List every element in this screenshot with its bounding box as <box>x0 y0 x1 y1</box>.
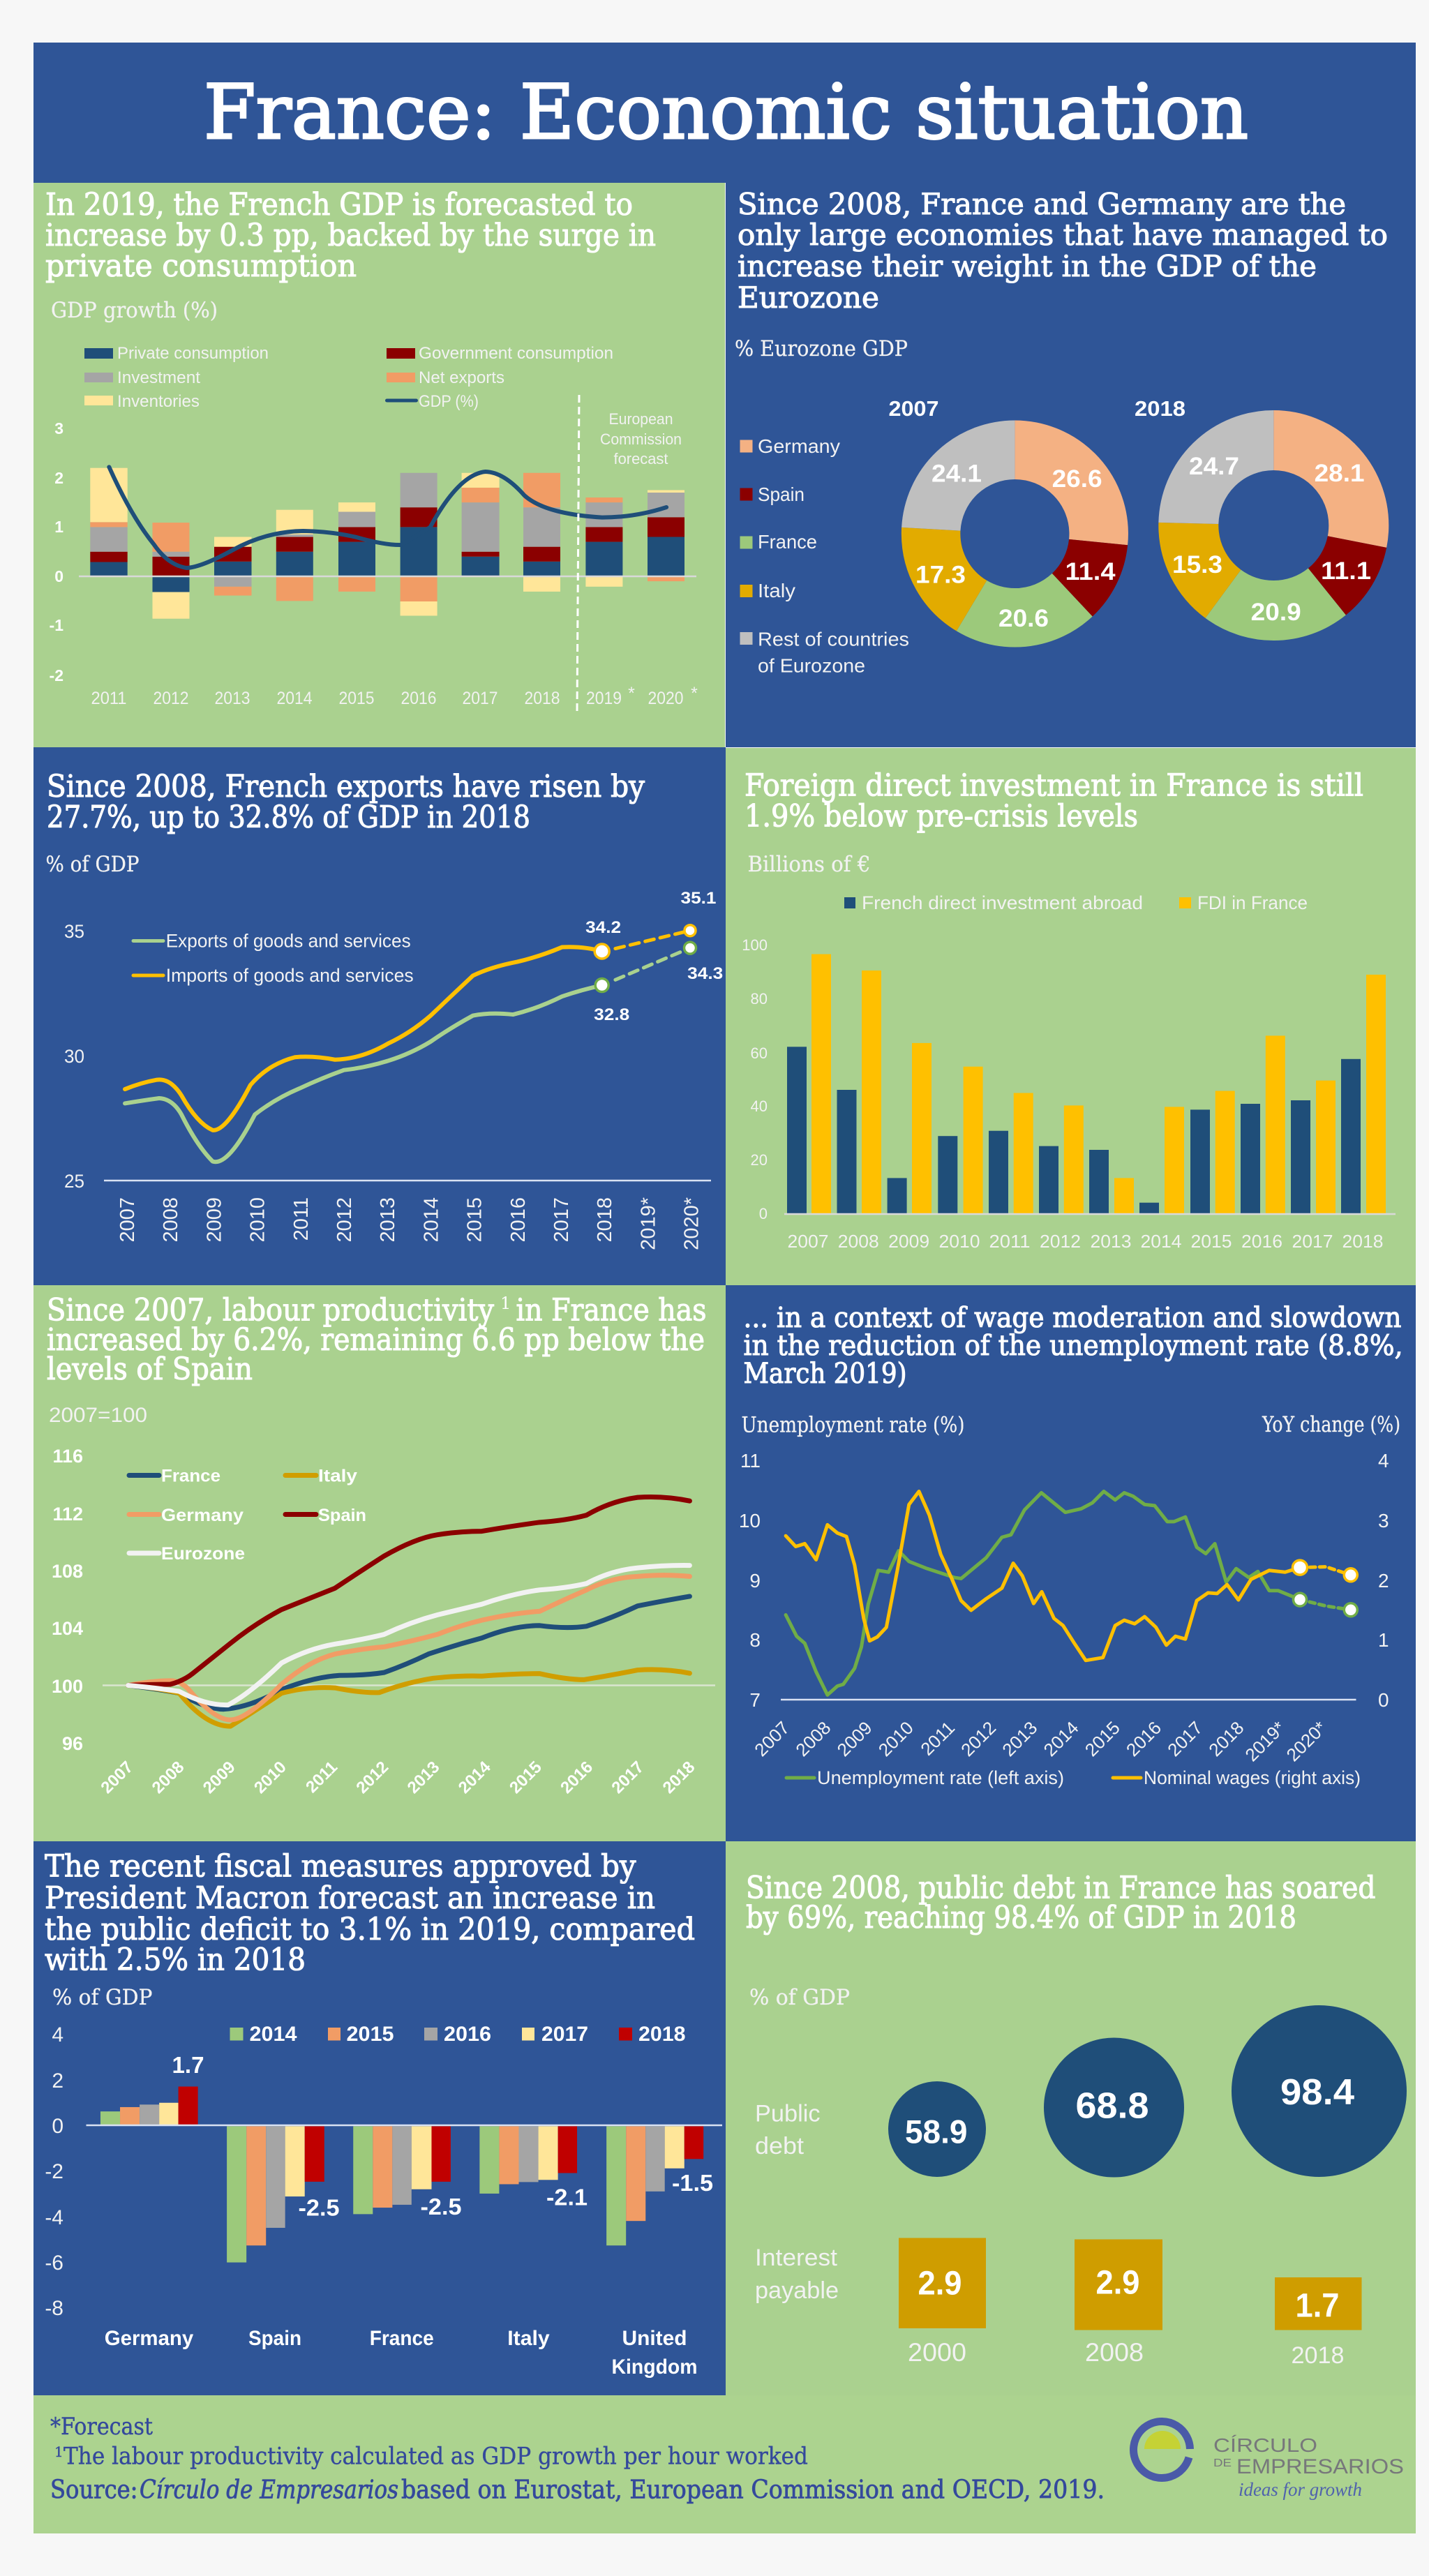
panel: exports and imports <box>33 747 726 1285</box>
y axis labels <box>64 921 84 1192</box>
exports line <box>125 948 690 1162</box>
legend: FDI in France <box>1197 892 1308 913</box>
heading: in France has <box>516 1292 706 1328</box>
x axis labels: 2016 <box>557 1758 597 1797</box>
heading: 1.9% below pre-crisis levels <box>745 798 1138 834</box>
x axis labels: 2009 <box>888 1231 929 1252</box>
heading: Eurozone <box>738 280 879 315</box>
x axis labels: 2014 <box>420 1197 442 1243</box>
source note: Círculo de Empresarios <box>140 2476 398 2505</box>
y axis labels: 3 <box>54 419 63 437</box>
y axis labels: 100 <box>52 1676 83 1697</box>
year labels: 2008 <box>1085 2338 1144 2367</box>
debt bubble 2000: 58.9 <box>905 2113 967 2150</box>
donut 2018 values <box>1172 453 1371 626</box>
row label: interest payable: Interest <box>755 2245 838 2271</box>
x axis labels: 2011 <box>302 1758 341 1797</box>
source note <box>50 2476 1105 2505</box>
x axis labels: 2012 <box>154 689 188 708</box>
year labels: 2000 <box>908 2338 966 2367</box>
x axis labels: 2018 <box>659 1758 698 1797</box>
heading: Foreign direct investment in France is still <box>745 767 1363 804</box>
year labels <box>908 2338 1344 2369</box>
x axis labels: 2016 <box>401 689 437 708</box>
x axis labels: 2011 <box>989 1231 1030 1252</box>
country labels: Germany <box>105 2327 194 2350</box>
x axis labels: 2020* <box>681 1197 703 1250</box>
data markers <box>1292 1560 1357 1617</box>
x axis labels: 2012 <box>957 1717 1000 1760</box>
x axis labels: 2010 <box>250 1758 290 1797</box>
row label: public debt: Public <box>755 2100 821 2127</box>
legend: Investment <box>117 368 200 387</box>
x axis labels: 2009 <box>833 1717 876 1760</box>
x axis labels: 2016 <box>1241 1231 1282 1252</box>
x axis labels: 2014 <box>1040 1717 1083 1760</box>
right axis title: YoY change (%) <box>1262 1412 1400 1437</box>
x axis labels: 2016 <box>507 1197 530 1243</box>
legend: Italy <box>758 580 795 601</box>
legend: Imports of goods and services <box>166 965 414 986</box>
x axis labels: 2010 <box>874 1717 918 1760</box>
imports line <box>125 931 690 1130</box>
y axis labels: -2 <box>45 2160 63 2183</box>
legend <box>786 1767 1361 1788</box>
y axis labels <box>50 419 63 684</box>
axis line <box>103 1684 715 1686</box>
x axis labels: 2013 <box>404 1758 443 1797</box>
legend: 2014 <box>250 2023 297 2046</box>
country labels <box>105 2327 698 2379</box>
x axis labels: 2015 <box>1190 1231 1232 1252</box>
heading: Since 2008, French exports have risen by <box>47 769 645 804</box>
x axis labels: 2020 <box>648 689 684 708</box>
value labels: -2.1 <box>546 2184 588 2210</box>
left y axis labels: 10 <box>739 1510 761 1532</box>
legend: French direct investment abroad <box>862 892 1143 913</box>
heading <box>745 767 1363 834</box>
logo wordmark: ideas for growth <box>1239 2479 1362 2500</box>
y axis labels: 40 <box>751 1098 768 1115</box>
x axis labels <box>117 1197 703 1250</box>
x axis labels: 2015 <box>506 1758 546 1797</box>
x axis labels: 2008 <box>791 1717 835 1760</box>
panel: unemployment and wages <box>726 1285 1416 1841</box>
legend: 2018 <box>638 2023 685 2046</box>
x axis labels: 2018 <box>594 1197 616 1243</box>
interest box 2000: 2.9 <box>918 2265 962 2302</box>
x axis labels <box>91 684 698 708</box>
y axis labels: 35 <box>64 921 84 942</box>
heading: 1 <box>500 1294 511 1313</box>
forecast divider <box>577 395 579 714</box>
y axis labels: 20 <box>751 1151 768 1169</box>
x axis labels <box>97 1758 698 1797</box>
x axis labels: 2018 <box>1342 1231 1383 1252</box>
x axis labels: 2013 <box>998 1717 1041 1760</box>
bars: French direct investment abroad <box>787 1047 1361 1214</box>
unit label: % of GDP <box>46 852 140 877</box>
interest box 2018 <box>1275 2277 1362 2330</box>
x axis labels: 2013 <box>215 689 250 708</box>
heading <box>744 1302 1402 1390</box>
y axis labels: 25 <box>64 1171 84 1192</box>
forecast note: *Forecast <box>50 2413 153 2441</box>
x axis labels: 2016 <box>1122 1717 1165 1760</box>
debt bubble 2018: 98.4 <box>1280 2072 1354 2113</box>
data labels: 34.2 <box>585 918 621 937</box>
x axis labels: 2007 <box>117 1197 139 1243</box>
x axis labels: 2014 <box>276 689 313 708</box>
y axis labels: 104 <box>52 1618 83 1639</box>
y axis labels <box>742 936 768 1222</box>
legend: Inventories <box>117 392 200 411</box>
country labels: Italy <box>507 2327 550 2350</box>
left y axis labels <box>739 1450 761 1711</box>
heading: In 2019, the French GDP is forecasted to <box>45 187 633 223</box>
donut 2007 values: 20.6 <box>998 605 1049 632</box>
country labels: France <box>370 2327 434 2350</box>
panel: GDP growth <box>33 183 725 747</box>
x axis labels: 2018 <box>1204 1717 1248 1760</box>
legend: Government consumption <box>419 344 613 363</box>
legend <box>84 344 613 411</box>
donut 2007 values: 24.1 <box>932 460 982 487</box>
forecast label: Commission <box>600 430 682 448</box>
legend: Rest of countries <box>758 628 909 650</box>
legend: Germany <box>161 1506 244 1525</box>
logo wordmark <box>1213 2434 1404 2500</box>
y axis labels: 2 <box>54 469 63 487</box>
donut 2018 values: 11.1 <box>1321 557 1371 585</box>
left y axis labels: 7 <box>749 1689 761 1711</box>
heading: increase by 0.3 pp, backed by the surge in <box>45 218 656 253</box>
forecast label <box>600 410 682 467</box>
productivity lines <box>128 1497 689 1726</box>
y axis labels: -2 <box>50 666 63 684</box>
legend: Spain <box>758 484 805 505</box>
source note: Source: <box>50 2476 138 2505</box>
y axis labels: 116 <box>52 1446 83 1467</box>
y axis labels: -8 <box>45 2297 63 2320</box>
bars: FDI in France <box>811 954 1386 1214</box>
year labels: 2007 <box>889 396 939 421</box>
axis line <box>87 2125 722 2126</box>
y axis labels: 80 <box>751 990 768 1008</box>
source note: based on Eurostat, European Commission and OECD, 2019. <box>401 2476 1105 2505</box>
x axis labels: 2011 <box>916 1717 959 1760</box>
logo wordmark: CÍRCULO <box>1213 2434 1317 2456</box>
x axis labels: 2014 <box>1140 1231 1182 1252</box>
legend: 2016 <box>444 2023 491 2046</box>
donut 2018 values: 28.1 <box>1315 460 1365 487</box>
left axis title: Unemployment rate (%) <box>741 1412 964 1437</box>
row label: public debt: debt <box>755 2133 805 2159</box>
x axis labels: 2019* <box>637 1197 659 1250</box>
y axis labels: 1 <box>54 518 63 536</box>
heading: ... in a context of wage moderation and slowdown <box>744 1302 1401 1334</box>
legend: GDP (%) <box>419 392 479 411</box>
x axis labels: 2013 <box>377 1197 399 1243</box>
y axis labels: 96 <box>62 1733 83 1754</box>
value labels <box>172 2052 713 2220</box>
legend <box>740 435 909 677</box>
x axis labels: 2012 <box>352 1758 392 1797</box>
axis line <box>79 576 696 577</box>
y axis labels: 108 <box>52 1561 83 1582</box>
legend: of Eurozone <box>758 654 865 677</box>
unit label: Billions of € <box>748 852 871 877</box>
donut 2018 values: 15.3 <box>1172 551 1222 578</box>
x axis labels: 2014 <box>455 1758 495 1797</box>
x axis labels: 2012 <box>334 1197 356 1243</box>
y axis labels: 100 <box>742 936 768 954</box>
x axis labels: 2008 <box>838 1231 879 1252</box>
productivity note: 1 <box>54 2443 63 2460</box>
heading: by 69%, reaching 98.4% of GDP in 2018 <box>746 1900 1296 1935</box>
x axis labels: 2015 <box>339 689 374 708</box>
y axis labels: 2 <box>52 2069 63 2092</box>
x axis labels: * <box>628 684 635 703</box>
country labels: United <box>622 2327 687 2350</box>
legend: 2017 <box>541 2023 588 2046</box>
donut 2018 values: 24.7 <box>1189 453 1239 480</box>
x axis labels: 2020* <box>1282 1717 1331 1765</box>
debt bubble 2008 <box>1044 2037 1184 2177</box>
x axis labels: * <box>691 684 698 703</box>
heading: in the reduction of the unemployment rate (8.8%, <box>744 1330 1402 1362</box>
x axis labels: 2009 <box>200 1758 239 1797</box>
row label: public debt <box>755 2100 821 2159</box>
heading <box>746 1870 1376 1935</box>
legend: 2015 <box>346 2023 394 2046</box>
heading <box>47 1292 706 1387</box>
logo mark <box>1134 2422 1190 2478</box>
legend: Unemployment rate (left axis) <box>817 1767 1064 1788</box>
x axis labels: 2015 <box>1081 1717 1124 1760</box>
y axis labels: 0 <box>54 567 63 585</box>
legend: France <box>758 531 817 553</box>
unit label: % Eurozone GDP <box>735 336 908 361</box>
x axis labels: 2019 <box>586 689 622 708</box>
forecast label: forecast <box>614 450 668 467</box>
panel: labour productivity <box>33 1285 726 1841</box>
legend <box>129 1467 366 1564</box>
axis line <box>784 1213 1396 1215</box>
x axis labels: 2018 <box>525 689 560 708</box>
x axis labels: 2013 <box>1090 1231 1132 1252</box>
panel: Eurozone GDP share <box>726 183 1416 747</box>
axis line <box>781 1699 1356 1700</box>
heading <box>45 1849 695 1977</box>
heading: The recent fiscal measures approved by <box>45 1849 636 1884</box>
x axis labels: 2012 <box>1040 1231 1081 1252</box>
y axis labels: -4 <box>45 2206 63 2229</box>
debt bubble 2008: 68.8 <box>1076 2086 1149 2127</box>
donut 2007 values: 26.6 <box>1052 465 1102 493</box>
debt bubble 2000 <box>888 2081 986 2177</box>
legend: Spain <box>318 1506 366 1525</box>
logo wordmark: EMPRESARIOS <box>1236 2455 1404 2478</box>
left y axis labels: 11 <box>740 1450 761 1472</box>
right y axis labels: 1 <box>1378 1629 1389 1651</box>
data labels: 32.8 <box>594 1005 629 1024</box>
x axis labels: 2010 <box>247 1197 269 1243</box>
right y axis labels <box>1378 1450 1389 1711</box>
data labels: 34.3 <box>687 964 723 983</box>
value labels: 1.7 <box>172 2052 204 2078</box>
interest box 2018: 1.7 <box>1295 2287 1340 2325</box>
panel: public deficit <box>33 1841 726 2395</box>
value labels: -2.5 <box>299 2195 339 2220</box>
heading <box>45 187 656 284</box>
title: France: Economic situation <box>204 69 1248 156</box>
y axis labels: -6 <box>45 2252 63 2275</box>
heading: the public deficit to 3.1% in 2019, compared <box>45 1912 695 1947</box>
right y axis labels: 3 <box>1378 1510 1389 1532</box>
grouped bars <box>100 2087 703 2263</box>
panel: foreign direct investment <box>726 748 1416 1285</box>
data markers <box>594 925 696 992</box>
legend <box>230 2023 685 2046</box>
unemployment line <box>786 1491 1351 1695</box>
heading: Since 2008, France and Germany are the <box>738 187 1346 221</box>
forecast label: European <box>608 410 673 428</box>
logo <box>1134 2422 1404 2500</box>
x axis labels: 2007 <box>787 1231 829 1252</box>
donut 2007 values: 11.4 <box>1065 558 1116 585</box>
logo wordmark: DE <box>1213 2457 1232 2469</box>
donut 2018 values: 20.9 <box>1251 599 1301 626</box>
x axis labels: 2017 <box>462 689 498 708</box>
legend: France <box>161 1467 220 1486</box>
interest box 2008: 2.9 <box>1095 2265 1140 2301</box>
unit label: GDP growth (%) <box>51 298 218 323</box>
unit label: % of GDP <box>749 1985 850 2010</box>
x axis labels: 2017 <box>608 1758 648 1797</box>
x axis labels: 2019* <box>1241 1717 1289 1765</box>
x axis labels: 2015 <box>464 1197 486 1243</box>
legend <box>844 892 1308 913</box>
legend <box>133 931 414 986</box>
heading: President Macron forecast an increase in <box>45 1880 655 1916</box>
debt bubble 2018 <box>1232 2005 1407 2177</box>
row label: interest payable <box>755 2245 839 2304</box>
x axis labels: 2009 <box>203 1197 225 1243</box>
x axis labels: 2011 <box>91 689 127 708</box>
heading <box>738 187 1388 315</box>
legend: Nominal wages (right axis) <box>1144 1767 1361 1788</box>
x axis labels <box>787 1231 1383 1252</box>
interest box 2000 <box>899 2238 986 2328</box>
legend: Private consumption <box>117 344 269 363</box>
heading: 27.7%, up to 32.8% of GDP in 2018 <box>47 800 530 835</box>
legend: Eurozone <box>161 1544 245 1564</box>
country labels: Kingdom <box>611 2356 698 2379</box>
panel: public debt <box>726 1841 1416 2396</box>
legend: Net exports <box>419 368 504 387</box>
heading: increased by 6.2%, remaining 6.6 pp below the <box>47 1322 705 1358</box>
unit label: 2007=100 <box>49 1404 147 1427</box>
heading: levels of Spain <box>47 1351 253 1387</box>
heading: increase their weight in the GDP of the <box>738 249 1317 283</box>
legend: Germany <box>758 435 840 457</box>
heading: with 2.5% in 2018 <box>45 1942 306 1977</box>
x axis labels: 2017 <box>1292 1231 1333 1252</box>
donut chart 2007 <box>931 450 1099 617</box>
heading: Since 2007, labour productivity <box>47 1292 494 1328</box>
x axis labels: 2008 <box>149 1758 188 1797</box>
y axis labels: 112 <box>52 1504 83 1525</box>
heading: March 2019) <box>744 1358 907 1390</box>
year labels: 2018 <box>1291 2342 1344 2369</box>
left y axis labels: 9 <box>749 1570 761 1592</box>
x axis labels: 2010 <box>939 1231 980 1252</box>
heading: private consumption <box>45 248 357 284</box>
nominal wages line <box>786 1491 1351 1661</box>
x axis labels: 2008 <box>160 1197 182 1243</box>
x axis labels: 2017 <box>551 1197 573 1243</box>
row label: interest payable: payable <box>755 2277 839 2304</box>
right y axis labels: 0 <box>1378 1689 1389 1711</box>
y axis labels: 30 <box>64 1046 84 1067</box>
right y axis labels: 2 <box>1378 1570 1389 1592</box>
y axis labels: 60 <box>751 1044 768 1062</box>
y axis labels: 4 <box>52 2023 63 2046</box>
x axis labels <box>750 1717 1331 1765</box>
y axis labels <box>52 1446 83 1754</box>
y axis labels: 0 <box>759 1205 768 1222</box>
x axis labels: 2007 <box>750 1717 793 1760</box>
heading: only large economies that have managed to <box>738 218 1388 252</box>
value labels: -1.5 <box>672 2170 713 2196</box>
country labels: Spain <box>248 2327 301 2350</box>
heading <box>47 769 645 835</box>
value labels: -2.5 <box>420 2194 462 2219</box>
interest box 2008 <box>1075 2240 1162 2330</box>
x axis labels: 2007 <box>97 1758 137 1797</box>
y axis labels: -1 <box>50 616 63 634</box>
unit label: % of GDP <box>52 1985 152 2010</box>
donut chart 2018 <box>1188 440 1359 611</box>
right y axis labels: 4 <box>1378 1450 1389 1472</box>
data labels: 35.1 <box>681 889 716 908</box>
stacked bars <box>90 468 684 619</box>
donut 2007 values: 17.3 <box>915 562 966 589</box>
x axis labels: 2011 <box>290 1197 313 1241</box>
legend: Exports of goods and services <box>166 931 411 952</box>
legend: Italy <box>318 1467 357 1486</box>
year labels: 2018 <box>1135 396 1185 421</box>
year labels <box>889 396 1185 421</box>
y axis labels: 0 <box>52 2115 63 2138</box>
axis line <box>104 1180 711 1181</box>
data labels <box>585 889 723 1024</box>
productivity note: The labour productivity calculated as GDP growth per hour worked <box>63 2442 808 2470</box>
title banner <box>33 43 1416 183</box>
footer <box>33 2395 1416 2533</box>
y axis labels <box>45 2023 63 2320</box>
GDP line <box>109 467 666 568</box>
donut 2007 values <box>915 460 1116 632</box>
left y axis labels: 8 <box>749 1629 761 1651</box>
x axis labels: 2017 <box>1163 1717 1206 1760</box>
